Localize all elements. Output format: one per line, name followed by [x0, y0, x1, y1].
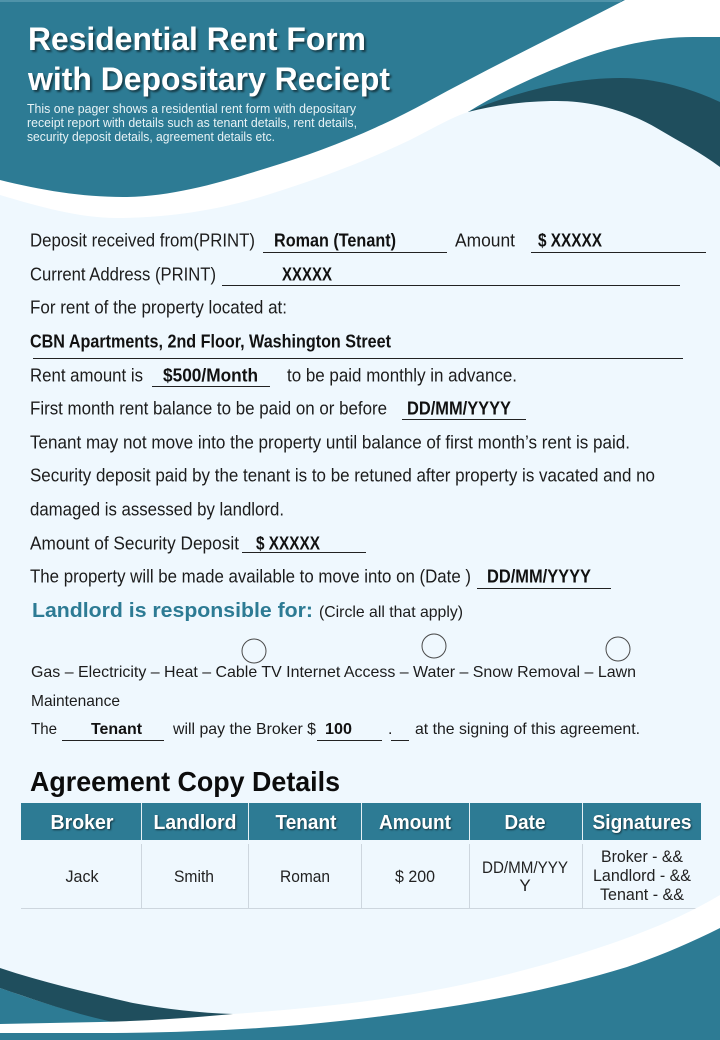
table header: Signatures — [592, 812, 692, 834]
agreement heading: Agreement Copy Details — [30, 766, 340, 797]
table header: Amount — [379, 812, 451, 834]
table body: $ 200 — [395, 867, 435, 886]
row: availability date: DD/MM/YYYY — [487, 566, 592, 586]
broker payment line — [31, 721, 640, 741]
row: tenant move in: Tenant may not move into the property until balance of first month’s rent is paid. — [30, 432, 630, 452]
table: agreement copy details — [21, 803, 701, 909]
row: deposit received: $ XXXXX — [538, 230, 603, 250]
row: current address: Current Address (PRINT) — [30, 264, 216, 284]
row: deposit received: Deposit received from(PRINT) — [30, 230, 255, 250]
utilities list: Gas – Electricity – Heat – Cable TV Internet Access – Water – Snow Removal – Lawn — [31, 664, 636, 681]
table header: Broker — [50, 812, 114, 834]
table header: Landlord — [154, 812, 236, 834]
header wave background — [0, 0, 720, 230]
row: deposit received: Amount — [455, 230, 515, 250]
table body: DD/MM/YYY — [482, 858, 568, 877]
title: with Depositary Reciept — [27, 61, 390, 97]
row: security deposit amount: $ XXXXX — [256, 532, 321, 554]
row: deposit received: Roman (Tenant) — [274, 230, 396, 250]
table header — [21, 803, 701, 840]
row: security deposit terms: Security deposit paid by the tenant is to be retuned after property is vacated and no — [30, 464, 655, 486]
row: current address — [30, 264, 680, 286]
description: This one pager shows a residential rent form with depositary — [27, 102, 357, 116]
table body: Roman — [280, 867, 330, 886]
form: deposit details — [30, 230, 706, 589]
broker payment line: at the signing of this agreement. — [415, 721, 640, 738]
table header: Date — [504, 812, 546, 834]
row: first month balance: DD/MM/YYYY — [407, 398, 512, 418]
title — [27, 21, 390, 97]
row: rent amount — [30, 364, 517, 387]
row: security deposit terms: damaged is assessed by landlord. — [30, 498, 284, 520]
row: rent amount: to be paid monthly in advance. — [287, 364, 517, 386]
table body: Y — [519, 876, 531, 895]
table header: Tenant — [276, 812, 337, 834]
footer wave background — [0, 895, 720, 1040]
table body: Jack — [66, 867, 99, 886]
row: rent amount: $500/Month — [163, 364, 258, 386]
description: security deposit details, agreement details etc. — [27, 130, 275, 144]
description — [27, 102, 357, 144]
row: property located: For rent of the property located at: — [30, 296, 287, 318]
utilities list: Maintenance — [31, 693, 120, 710]
table body: Smith — [174, 867, 214, 886]
row: security deposit amount: Amount of Security Deposit — [30, 532, 239, 554]
table body: Broker - && — [601, 847, 684, 866]
landlord heading: (Circle all that apply) — [319, 604, 463, 621]
broker payment line: Tenant — [91, 721, 143, 738]
title: Residential Rent Form — [28, 21, 366, 57]
landlord heading: Landlord is responsible for: — [32, 600, 313, 622]
icon: circled options — [242, 634, 630, 663]
row: deposit received — [30, 230, 706, 253]
table body: Tenant - && — [600, 885, 685, 904]
utilities list — [31, 664, 636, 710]
row: security deposit terms — [30, 464, 655, 520]
row: current address: XXXXX — [282, 264, 333, 284]
table body: Landlord - && — [593, 866, 692, 885]
row: security deposit amount — [30, 532, 366, 554]
table body — [21, 844, 701, 909]
description: receipt report with details such as tenant details, rent details, — [27, 116, 357, 130]
row: property address: CBN Apartments, 2nd Floor, Washington Street — [30, 330, 391, 352]
row: first month balance: First month rent balance to be paid on or before — [30, 398, 387, 418]
row: availability date: The property will be made available to move into on (Date ) — [30, 566, 471, 586]
landlord heading — [32, 600, 463, 622]
broker payment line: The — [31, 721, 57, 738]
broker payment line: 100 — [325, 721, 352, 738]
broker payment line: . — [388, 721, 392, 738]
broker payment line: will pay the Broker $ — [172, 721, 316, 738]
row: rent amount: Rent amount is — [30, 364, 143, 386]
